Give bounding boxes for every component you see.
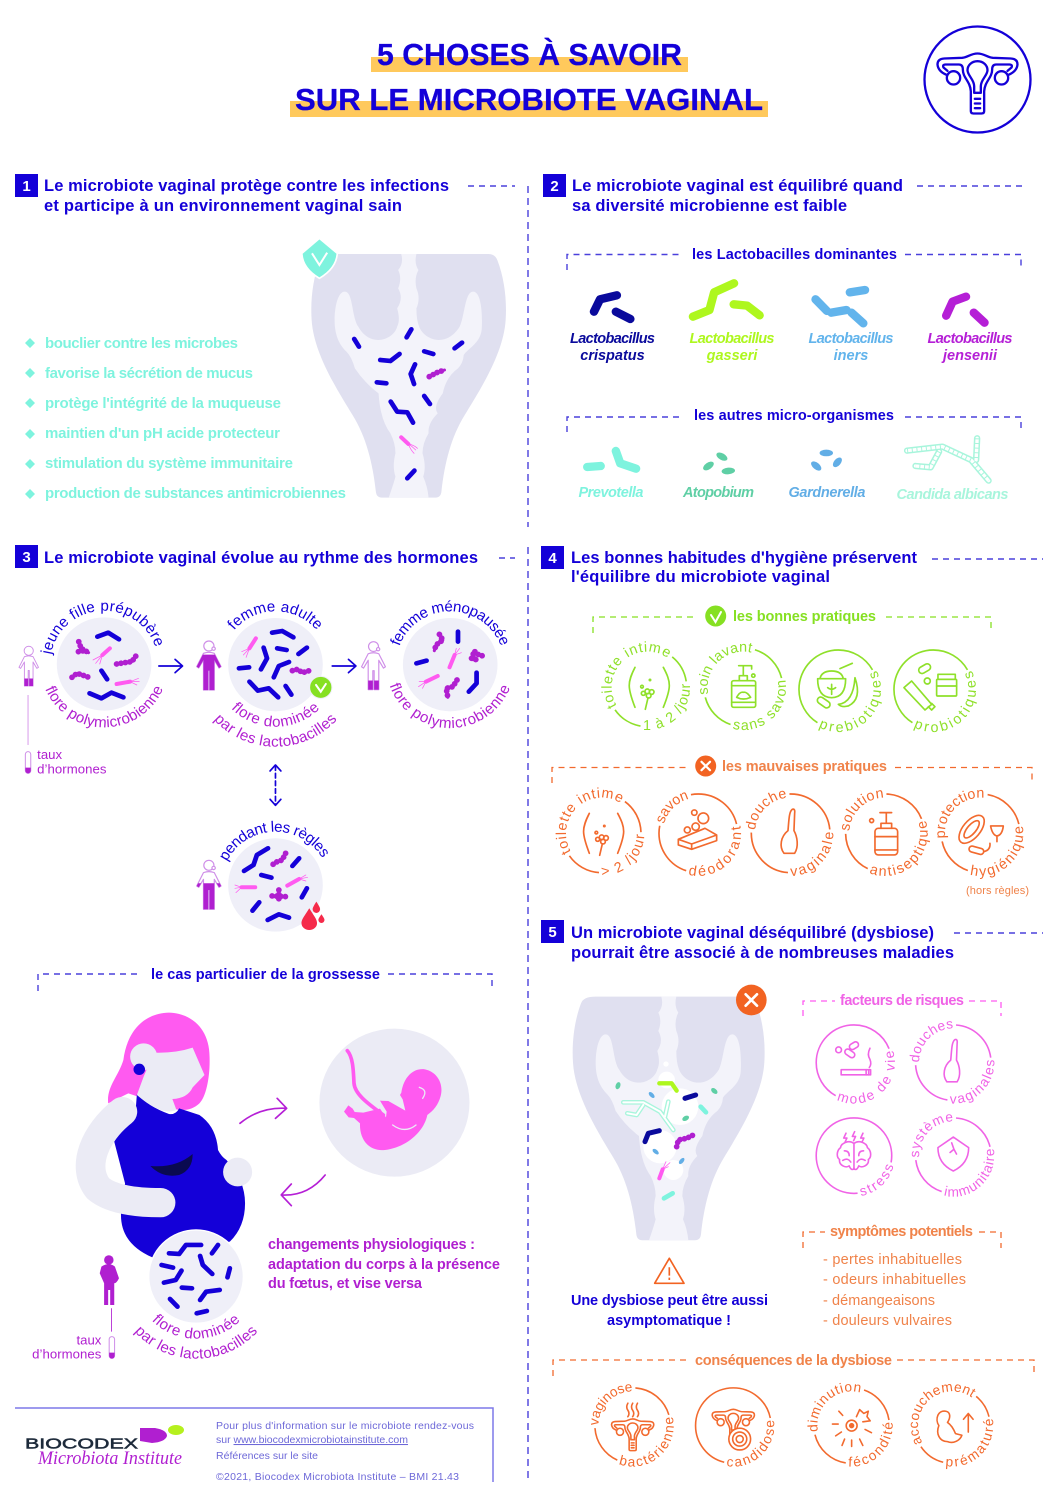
footer text: [216, 1420, 474, 1483]
panel: section 5 dysbiosis: [541, 920, 1043, 1470]
consequence icons: [591, 1382, 994, 1470]
heading 5: pourrait être associé à de nombreuses maladies: [571, 944, 954, 962]
icon: premature birth: prématuré: [946, 1419, 994, 1470]
bullet list of benefits: bouclier contre les microbes: [45, 335, 238, 352]
icon: lifestyle: [815, 1024, 895, 1104]
icon: bacterial vaginosis: vaginose: [591, 1384, 632, 1425]
labels: other organisms: Prevotella: [578, 485, 644, 501]
labels: lactobacilli species: Lactobacillus: [690, 331, 774, 347]
dashed double arrow: [273, 766, 278, 805]
bacteria icons: other organisms: [587, 438, 989, 481]
icon: vaginal douches: vaginales: [950, 1060, 994, 1104]
icon: immune system: [912, 1114, 994, 1197]
logo: BIOCODEX: [25, 1436, 138, 1452]
subheading: bad practices: les mauvaises pratiques: [722, 759, 887, 775]
footer text: ©2021, Biocodex Microbiota Institute – BMI 21.43: [216, 1471, 459, 1483]
stage: prepubescent girl: jeune fille prépubère: [40, 602, 162, 656]
bad practice icons: [556, 787, 1024, 879]
panel: section 4 hygiene: [541, 546, 1043, 897]
icon: immune system: immunitaire: [944, 1149, 994, 1197]
small figure and hormone key: taux: [76, 1332, 102, 1347]
icon: wash more than 2 per day: > 2 /jour: [602, 834, 644, 875]
title: 5 CHOSES À SAVOIR: [377, 37, 682, 72]
icon: warning triangle: [655, 1258, 684, 1283]
icon: bacterial vaginosis: [591, 1384, 674, 1467]
labels: other organisms: Atopobium: [682, 485, 754, 501]
subheading: pregnancy: [38, 967, 492, 991]
bullet list of benefits: favorise la sécrétion de mucus: [45, 365, 253, 382]
icon: sanitary protection: [937, 790, 1024, 879]
subheading: dominant lactobacilli: [567, 247, 1021, 270]
icon: antiseptic solution: [842, 790, 930, 876]
icon: antiseptic solution: solution: [842, 790, 884, 831]
icon: immune system: système: [912, 1114, 952, 1158]
small figure and hormone key: [32, 1255, 119, 1361]
heading 5: 5: [548, 924, 557, 941]
icon: sanitary protection: hygiénique: [970, 826, 1024, 879]
bullet list of benefits: [25, 335, 346, 502]
arrow: mother to foetus: [240, 1098, 287, 1123]
icon: soap-free wash: sans savon: [733, 680, 786, 730]
heading 3: Le microbiote vaginal évolue au rythme des hormones: [44, 549, 478, 567]
bullet list of benefits: protège l'intégrité de la muqueuse: [45, 395, 281, 412]
heading 1: Le microbiote vaginal protège contre les infections: [44, 177, 449, 195]
heading 2: [543, 174, 1027, 215]
text: physiological changes: [268, 1237, 500, 1292]
stage: menopausal woman: [361, 600, 510, 728]
icon: wash more than 2 per day: [556, 787, 644, 875]
arrow: foetus to mother: [281, 1175, 325, 1206]
arrow: [332, 659, 356, 673]
icon: vaginal douche: [746, 790, 834, 876]
footer text: Pour plus d'information sur le microbiote rendez-vous: [216, 1420, 474, 1432]
stage: menopausal woman: femme ménopausée: [390, 600, 508, 646]
icon: reduced fertility: [807, 1382, 893, 1467]
title: SUR LE MICROBIOTE VAGINAL: [295, 82, 763, 117]
labels: other organisms: Candida albicans: [896, 487, 1008, 503]
icon: antiseptic solution: antiseptique: [870, 821, 930, 876]
symptom list: - pertes inhabituelles: [823, 1252, 962, 1268]
text: physiological changes: changements physiologiques :: [268, 1237, 475, 1253]
stage: prepubescent girl: flore polymicrobienne: [46, 686, 162, 728]
icon: uterus emblem: [924, 26, 1030, 132]
risk factor icons: [815, 1021, 994, 1197]
icon: intimate wash 1-2 per day: 1 à 2 /jour: [644, 684, 690, 730]
good practice icons: [601, 641, 977, 732]
stage: menopausal woman: flore polymicrobienne: [390, 682, 510, 728]
icon: bacterial vaginosis: bactérienne: [619, 1417, 674, 1467]
subheading: symptoms: [803, 1224, 1001, 1248]
icon: stress: stress: [860, 1164, 893, 1196]
labels: lactobacilli species: [570, 331, 1012, 364]
text: asymptomatic note: Une dysbiose peut être aussi: [571, 1293, 768, 1309]
bullet list of benefits: maintien d'un pH acide protecteur: [45, 425, 280, 442]
panel: section 2 diversity: [543, 174, 1027, 503]
symptom list: - odeurs inhabituelles: [823, 1272, 966, 1288]
illustration: pregnant woman and foetus: [32, 1012, 470, 1361]
icon: soap and deodorant: savon: [658, 792, 688, 823]
bacteria icons: lactobacilli: [594, 283, 985, 323]
illustration: dysbiotic flora: [573, 985, 767, 1240]
bullet list of benefits: stimulation du système immunitaire: [45, 455, 293, 472]
bullet list of benefits: production de substances antimicrobiennes: [45, 485, 346, 502]
subheading: symptoms: symptômes potentiels: [830, 1224, 973, 1240]
icon: reduced fertility: diminution: [807, 1382, 860, 1432]
column divider: [527, 186, 529, 1480]
icon: soap and deodorant: déodorant: [689, 826, 742, 876]
heading 4: Les bonnes habitudes d'hygiène préservent: [571, 549, 918, 567]
curved label: par les lactobacilles: [132, 1326, 257, 1359]
subheading: risk factors: [803, 993, 1001, 1016]
icon: vaginal douche: douche: [746, 790, 786, 830]
subheading: consequences: conséquences de la dysbiose: [695, 1353, 892, 1369]
icon: premature birth: accouchement: [910, 1384, 976, 1444]
labels: lactobacilli species: Lactobacillus: [808, 331, 894, 347]
heading 4: l'équilibre du microbiote vaginal: [571, 568, 830, 586]
hormone level key: d’hormones: [37, 761, 107, 776]
labels: lactobacilli species: gasseri: [706, 348, 758, 364]
symptom list: - démangeaisons: [823, 1293, 935, 1309]
icon: intimate wash 1-2 per day: [601, 641, 690, 730]
icon: sanitary protection: protection: [937, 790, 984, 838]
title: [290, 37, 768, 117]
stage: during periods: pendant les règles: [220, 820, 328, 862]
text: physiological changes: adaptation du corps à la présence: [268, 1257, 500, 1273]
icon: intimate wash 1-2 per day: toilette intime: [601, 641, 670, 710]
labels: lactobacilli species: Lactobacillus: [928, 331, 1012, 347]
illustration: healthy vaginal flora: [302, 238, 506, 498]
pregnant woman: [91, 1013, 252, 1323]
labels: lactobacilli species: crispatus: [580, 348, 645, 364]
panel: section 3 hormones: [15, 545, 515, 1361]
subheading: pregnancy: le cas particulier de la grossesse: [151, 967, 380, 983]
heading 3: 3: [22, 549, 31, 566]
heading 4: [541, 546, 1043, 586]
labels: lactobacilli species: iners: [834, 348, 868, 364]
heading 4: 4: [548, 550, 557, 567]
hormone level key: [25, 695, 107, 776]
icon: soap and deodorant: [658, 792, 742, 876]
icon: soap-free wash: [699, 643, 786, 730]
labels: lactobacilli species: Lactobacillus: [570, 331, 655, 347]
heading 5: Un microbiote vaginal déséquilibré (dysbiose): [571, 924, 934, 942]
panel: section 1 protection: [15, 174, 515, 502]
stage: adult woman: femme adulte: [228, 603, 321, 630]
labels: other organisms: [578, 485, 1008, 503]
icon: prebiotics: [798, 649, 882, 732]
icon: reduced fertility: fécondité: [848, 1422, 893, 1467]
heading 1: [15, 174, 515, 215]
text: physiological changes: du fœtus, et vise versa: [268, 1276, 423, 1292]
stage: adult woman: par les lactobacilles: [212, 715, 336, 747]
subheading: good practices: les bonnes pratiques: [733, 609, 876, 625]
footer text: Références sur le site: [216, 1450, 318, 1462]
subheading: dominant lactobacilli: les Lactobacilles dominantes: [692, 247, 897, 263]
arrow: [159, 659, 183, 673]
icon: premature birth: [910, 1384, 994, 1470]
panel: footer: [15, 1408, 493, 1483]
heading 5: [541, 920, 1043, 962]
heading 2: Le microbiote vaginal est équilibré quand: [572, 177, 903, 195]
subheading: good practices: [593, 606, 991, 633]
stage: adult woman: [196, 603, 336, 747]
icon: wash more than 2 per day: toilette intime: [556, 787, 622, 856]
icon: vaginal douches: douches: [910, 1021, 953, 1062]
icon: candidiasis: candidose: [727, 1420, 774, 1467]
icon: candidiasis: [694, 1387, 774, 1467]
heading 1: et participe à un environnement vaginal sain: [44, 197, 402, 215]
subheading: consequences: [553, 1353, 1034, 1376]
text: asymptomatic note: [571, 1293, 768, 1329]
foetus: [344, 1051, 441, 1150]
symptom list: - douleurs vulvaires: [823, 1313, 952, 1329]
icon: stress: [815, 1117, 893, 1196]
stage: during periods: [196, 820, 328, 932]
labels: lactobacilli species: jensenii: [941, 348, 998, 364]
heading 3: [15, 545, 515, 568]
icon: probiotics: [893, 649, 977, 732]
icon: vaginal douche: vaginale: [790, 832, 834, 876]
subheading: other micro-organisms: les autres micro-organismes: [694, 408, 894, 424]
logo: [25, 1425, 184, 1469]
heading 2: sa diversité microbienne est faible: [572, 197, 847, 215]
note: excluding periods: (hors règles): [966, 885, 1029, 897]
subheading: other micro-organisms: [567, 408, 1021, 432]
curved label: flore dominée: [152, 1314, 239, 1339]
labels: other organisms: Gardnerella: [788, 485, 866, 501]
icon: soap-free wash: soin lavant: [699, 643, 752, 694]
subheading: risk factors: facteurs de risques: [840, 993, 964, 1009]
stage: prepubescent girl: [18, 602, 162, 728]
subheading: bad practices: [552, 756, 1032, 783]
icon: prebiotics: prebiotiques: [818, 671, 882, 732]
icon: probiotics: probiotiques: [913, 671, 977, 732]
stage: adult woman: flore dominée: [232, 702, 318, 727]
life-stage diagram: [18, 600, 510, 932]
footer text: sur www.biocodexmicrobiotainstitute.com: [216, 1434, 408, 1446]
heading 2: 2: [550, 178, 559, 195]
text: asymptomatic note: asymptomatique !: [607, 1313, 731, 1329]
small figure and hormone key: d’hormones: [32, 1346, 102, 1361]
icon: lifestyle: mode de vie: [837, 1051, 895, 1104]
icon: vaginal douches: [910, 1021, 994, 1104]
symptom list: [823, 1252, 966, 1329]
hormone level key: taux: [37, 747, 63, 762]
logo: Microbiota Institute: [37, 1448, 182, 1469]
heading 1: 1: [22, 178, 31, 195]
